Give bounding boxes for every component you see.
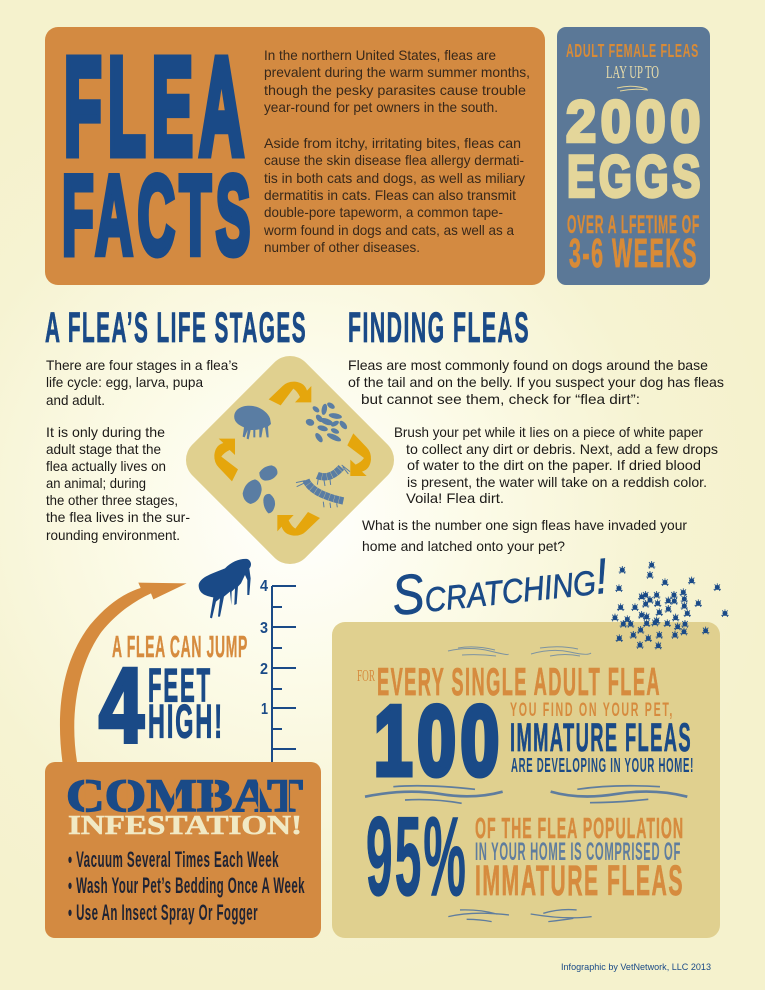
text: for: FOR [357, 666, 375, 685]
panel: flea facts intro: FACTS [62, 153, 255, 278]
text block: four stages: and adult. [46, 392, 105, 408]
height ruler: 2 [260, 661, 268, 678]
list: control tips: • Vacuum Several Times Each Week [68, 847, 279, 872]
number: 100: 100 [374, 686, 504, 796]
list: control tips: • Use An Insect Spray Or Fogger [68, 900, 258, 925]
arrow: adult to eggs [269, 382, 311, 405]
text block: diseases: double-pore tapeworm, a common tape- [264, 204, 503, 220]
text block: diseases: tis in both cats and dogs, as well as miliary [264, 170, 525, 186]
text block: seasonal prevalence: In the northern United States, fleas are [264, 47, 496, 63]
text block: diseases: dermatitis in cats. Fleas can also transmit [264, 187, 516, 203]
list: control tips [68, 847, 305, 925]
text block: finding fleas intro: Fleas are most commonly found on dogs around the base [348, 357, 708, 373]
text block: seasonal prevalence: year-round for pet owners in the south. [264, 99, 498, 115]
icon: eggs [305, 401, 349, 444]
icon: flea swarm [611, 561, 729, 649]
icon: jumping flea [199, 559, 251, 618]
text block: diseases: number of other diseases. [264, 239, 420, 255]
text block: number one sign question [362, 517, 687, 554]
swash: middle [365, 786, 687, 803]
text: A FLEA’S LIFE STAGES [45, 304, 307, 352]
icon: pupae [243, 465, 277, 513]
text block: adult stage: flea actually lives on [46, 458, 166, 474]
number: 4: 4 [99, 647, 145, 765]
text: eggs: EGGS [567, 144, 704, 210]
text block: diseases: Aside from itchy, irritating bites, fleas can [264, 135, 521, 151]
height ruler: 1 [261, 701, 268, 718]
text block: flea dirt test: to collect any dirt or debris. Next, add a few drops [406, 441, 718, 457]
text block: adult stage: It is only during the [46, 424, 165, 440]
jump arc arrow [60, 583, 187, 764]
text block: adult stage [46, 424, 190, 543]
text block: adult stage: rounding environment. [46, 527, 180, 543]
panel: flea facts intro [45, 27, 545, 285]
text block: number one sign question: home and latched onto your pet? [362, 538, 565, 554]
height ruler: 4 [260, 578, 268, 595]
text block: four stages [46, 357, 238, 408]
text block: diseases: cause the skin disease flea allergy dermati- [264, 152, 524, 168]
text block: flea dirt test: Brush your pet while it lies on a piece of white paper [394, 424, 703, 440]
life cycle diagram [177, 347, 403, 573]
text block: finding fleas intro [348, 357, 724, 407]
text block: flea dirt test [394, 424, 718, 506]
text: A FLEA CAN JUMP [112, 629, 248, 664]
text block: seasonal prevalence: though the pesky parasites cause trouble [264, 82, 526, 98]
text block: finding fleas intro: of the tail and on the belly. If you suspect your dog has fleas [348, 374, 724, 390]
panel: immature fleas stats [332, 622, 720, 938]
number: 2000: 2000 [566, 90, 705, 154]
text block: seasonal prevalence [264, 47, 530, 115]
text block: four stages: life cycle: egg, larva, pupa [46, 374, 203, 390]
height ruler [260, 578, 296, 763]
icon: adult flea [234, 406, 271, 439]
heading: infestation: INFESTATION! [68, 810, 302, 840]
text block: finding fleas intro: but cannot see them, check for “flea dirt”: [361, 391, 640, 407]
text block: diseases: worm found in dogs and cats, as well as a [263, 222, 514, 238]
arrow: pupae to adult [214, 439, 238, 481]
text: FINDING FLEAS [348, 304, 530, 352]
text block: adult stage: the flea lives in the sur- [46, 509, 190, 525]
panel: combat infestation [45, 762, 321, 938]
arrow: larvae to pupae [277, 512, 320, 536]
text: lay up to: LAY UP TO [606, 62, 659, 82]
text block: number one sign question: What is the number one sign fleas have invaded your [362, 517, 687, 533]
swash: top [448, 647, 591, 656]
list: control tips: • Wash Your Pet’s Bedding Once A Week [68, 873, 305, 898]
text: FEET [148, 658, 212, 712]
text block: flea dirt test: Voila! Flea dirt. [406, 490, 504, 506]
arrow: eggs to larvae [347, 433, 371, 476]
height ruler: 3 [260, 620, 268, 637]
heading: combat: COMBAT [66, 770, 303, 822]
text block: adult stage: an animal; during [46, 475, 146, 491]
credit: Infographic by VetNetwork, LLC 2013 [561, 962, 711, 973]
text block: flea dirt test: is present, the water will take on a reddish color. [407, 474, 707, 490]
text block: flea dirt test: of water to the dirt on the paper. If dried blood [407, 457, 701, 473]
text block: adult stage: the other three stages, [46, 492, 178, 508]
text block: four stages: There are four stages in a flea’s [46, 357, 238, 373]
text block: adult stage: adult stage that the [46, 441, 161, 457]
swash: bottom [448, 910, 592, 922]
swash [617, 86, 648, 91]
icon: larvae [296, 465, 350, 508]
heading: scratching: SCRATCHING! [389, 542, 610, 627]
panel: diamond [177, 347, 403, 573]
panel: flea facts intro: FLEA [64, 30, 250, 184]
text block: seasonal prevalence: prevalent during the warm summer months, [264, 64, 530, 80]
text: HIGH! [148, 694, 224, 748]
panel: eggs statistic [557, 27, 710, 285]
text block: diseases [263, 135, 525, 255]
panel: immature fleas stats: 95% [366, 794, 468, 919]
